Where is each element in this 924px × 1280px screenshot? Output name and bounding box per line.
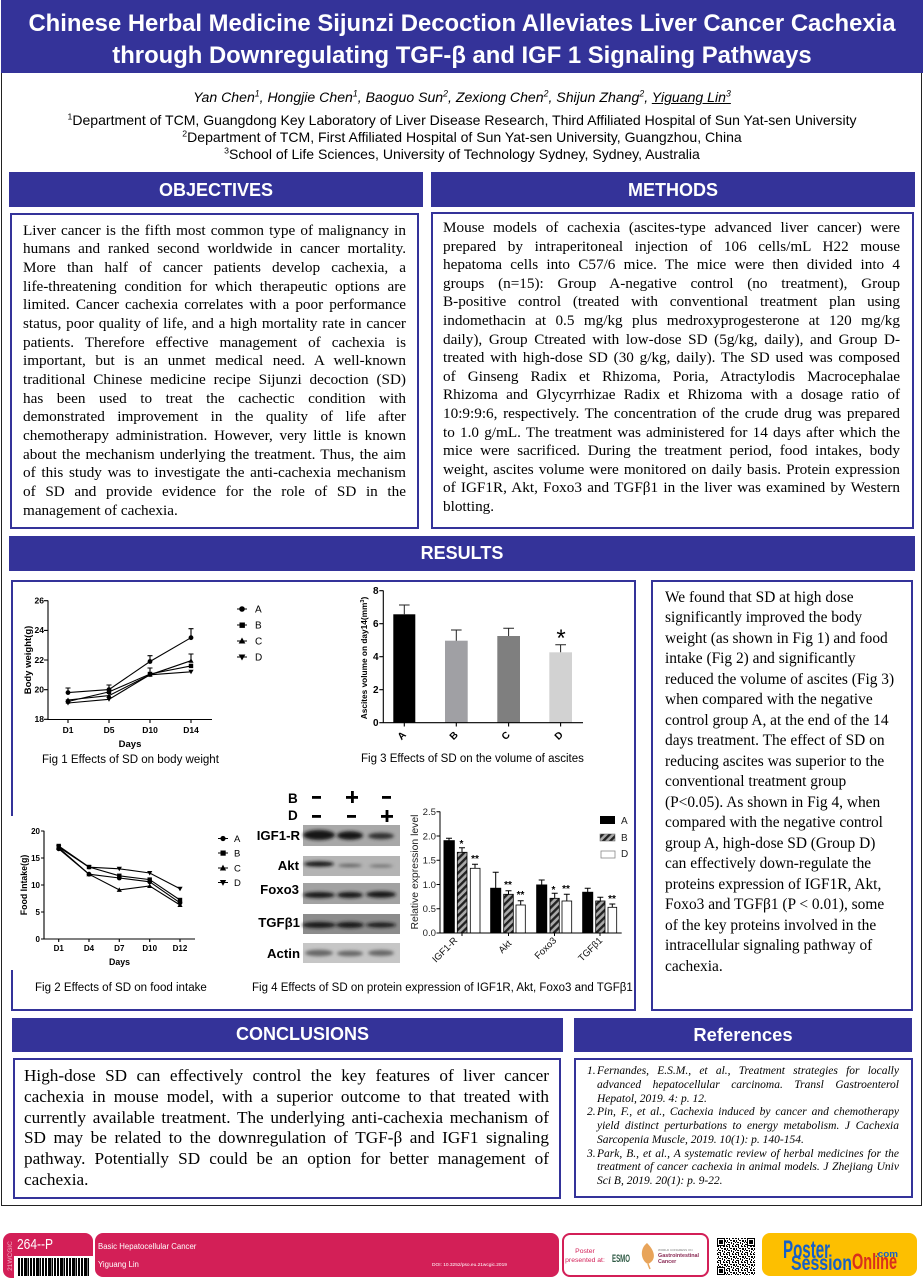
footer: presented at logos: presented at: [565, 1257, 605, 1264]
objectives text: important, but is an unmet medical need. A well-known [23, 352, 406, 369]
chart: Fig 2 food intake: C [234, 864, 241, 874]
footer: barcode [14, 1256, 93, 1278]
chart: Fig 2 food intake: D10 [142, 944, 158, 953]
results text: control group A, at the end of the 14 [665, 712, 889, 728]
references text [596, 1065, 899, 1187]
western blot: B [288, 791, 298, 806]
footer: poster number tab [3, 1233, 93, 1278]
title: Chinese Herbal Medicine Sijunzi Decoction Alleviates Liver Cancer Cachexia [28, 10, 896, 37]
results text: proteins expression of IGF1R, Akt, [665, 876, 881, 892]
chart: Fig 4 relative expression: Akt [497, 938, 514, 956]
western blot: TGFβ1 [258, 915, 300, 930]
chart: Fig 1 body weight: 18 [35, 714, 44, 724]
chart: Fig 4 relative expression: IGF1-R [430, 935, 460, 965]
chart: Fig 1 body weight [23, 596, 262, 750]
chart: Fig 4 relative expression: 2.0 [423, 832, 436, 842]
results text: days treatment. The effect of SD on [665, 732, 885, 749]
methods text: groups (n=15): Group A-negative control (no treatment), Group [443, 275, 900, 292]
chart: Fig 2 food intake: 10 [31, 881, 41, 890]
objectives text: demonstrated improvement in the quality of life after [23, 408, 406, 425]
footer: congress code: 21WCGIC [7, 1241, 14, 1271]
caption: Fig 2: Fig 2 Effects of SD on food intake [35, 982, 207, 994]
western blot: D [288, 808, 298, 823]
chart: Fig 3 ascites volume: 6 [373, 619, 379, 630]
chart: Fig 2 food intake: Food Intake(g) [19, 855, 29, 915]
footer: presented at logos: Poster [575, 1248, 596, 1255]
chart: Fig 4 relative expression: * [460, 839, 464, 850]
affiliations: 3School of Life Sciences, University of Technology Sydney, Sydney, Australia [224, 146, 700, 162]
title [1, 0, 923, 73]
chart: Fig 2 food intake: D [234, 878, 241, 889]
methods text: weight, ascites volume were monitored on daily basis. Protein expression [443, 461, 900, 478]
chart: Fig 4 relative expression: B [621, 833, 628, 844]
footer: presented at logos: WORLD CONGRESS ON [658, 1248, 693, 1252]
chart: Fig 2 food intake: D7 [114, 944, 125, 953]
panel: objectives [10, 213, 419, 529]
heading: references: References [693, 1024, 793, 1045]
references text: Sci B, 2019. 20(1): p. 9-22. [597, 1175, 723, 1187]
methods text: Rhizoma and Glycyrrhizae Radix et Rhizoma with a dosage ratio of [443, 386, 900, 403]
references text: Pin, F., et al., Cachexia induced by cancer and chemotherapy [597, 1106, 899, 1118]
chart: Fig 2 food intake: A [234, 834, 241, 845]
conclusions text [24, 1066, 549, 1189]
results text: intake (Fig 2) and significantly [665, 650, 856, 667]
chart: Fig 3 ascites volume: 2 [373, 685, 379, 696]
heading: methods [431, 172, 915, 207]
results text: of the key proteins involved in the [665, 916, 876, 934]
methods text: Mouse models of cachexia (ascites-type advanced liver cancer) were [443, 219, 900, 236]
session category: Basic Hepatocellular Cancer [98, 1242, 196, 1251]
objectives text: of SD and provide evidence for the role of SD in the [23, 483, 406, 500]
objectives text: More than half of cancer patients develop cachexia, a [23, 259, 406, 276]
caption: Fig 4: Fig 4 Effects of SD on protein expression of IGF1R, Akt, Foxo3 and TGFβ1 [252, 982, 633, 994]
western blot [257, 791, 400, 963]
objectives text: limited. Cancer cachexia correlates with a poor performance [23, 296, 406, 313]
objectives text: of this study was to investigate the anti-cachexia mechanism [23, 464, 406, 481]
chart: Fig 4 relative expression: * [552, 885, 556, 896]
methods text: prepared by intraperitoneal injection of 106 cells/mL H22 mouse [443, 238, 900, 255]
chart: Fig 4 relative expression: A [621, 816, 628, 827]
footer: presented at logos: ESMO [612, 1253, 630, 1265]
heading: objectives [9, 172, 423, 207]
chart: Fig 4 relative expression: 0.5 [423, 904, 436, 915]
references numbers [587, 1065, 596, 1160]
chart: Fig 1 body weight: 20 [35, 684, 44, 694]
chart: Fig 1 body weight: 22 [35, 655, 44, 665]
methods text: to 1.0 g/mL. The treatment was administered for 14 days after which the [443, 424, 900, 441]
chart: Fig 3 ascites volume: A [396, 730, 409, 743]
caption: Fig 3: Fig 3 Effects of SD on the volume of ascites [361, 753, 584, 765]
footer: PosterSessionOnline logo [762, 1233, 917, 1276]
western blot: IGF1-R [257, 828, 300, 843]
chart: Fig 4 relative expression: 1.5 [423, 856, 436, 866]
affiliations [67, 111, 856, 162]
objectives text: traditional Chinese medicine recipe Sijunzi decoction (SD) [23, 371, 406, 388]
chart: Fig 2 food intake: 0 [36, 935, 41, 944]
results text: (P<0.05). As shown in Fig 4, when [665, 794, 880, 810]
chart: Fig 3 ascites volume: 3 [360, 600, 366, 603]
results text: intracellular signaling pathway of [665, 937, 872, 954]
chart: Fig 4 relative expression: ** [504, 880, 512, 891]
objectives text: humans and ranked second worldwide in cancer mortality. [23, 240, 406, 257]
objectives text: status, poor quality of life, and a high mortality rate in cancer [23, 315, 406, 332]
chart: Fig 2 food intake: 20 [31, 827, 41, 836]
footer: presented at logos: Cancer [658, 1259, 677, 1265]
objectives text: patients. Therefore effective management of cachexia is [23, 334, 406, 351]
panel: results text [651, 580, 913, 1011]
conclusions text: High-dose SD can effectively control the key features of liver cancer [24, 1066, 549, 1085]
heading: methods: METHODS [628, 180, 718, 200]
chart: Fig 1 body weight: B [255, 620, 262, 632]
caption: Fig 1: Fig 1 Effects of SD on body weight [42, 754, 220, 766]
chart: Fig 4 relative expression [410, 807, 628, 965]
results text: reducing ascites was superior to the [665, 752, 884, 770]
chart: Fig 1 body weight: A [255, 604, 262, 616]
footer: presented at logos [565, 1243, 700, 1270]
references text: treatment of cancer cachexia in animal models. J Zhejiang Univ [597, 1161, 899, 1173]
chart: Fig 4 relative expression: Relative expression level [410, 815, 421, 929]
references text: Hepatol, 2019. 4: p. 12. [597, 1092, 707, 1104]
chart: Fig 3 ascites volume: * [556, 625, 566, 652]
chart: Fig 1 body weight: D1 [63, 725, 74, 735]
results text: significantly improved the body [665, 609, 862, 626]
objectives text: has been used to treat the cachectic condition with [23, 390, 406, 407]
results text: when compared with the negative [665, 691, 873, 708]
western blot: Foxo3 [260, 882, 299, 897]
chart: Fig 3 ascites volume: 0 [373, 718, 379, 729]
chart: Fig 3 ascites volume: 4 [373, 652, 379, 663]
chart: Fig 4 relative expression: 0.0 [423, 928, 436, 939]
panel: references [574, 1058, 913, 1198]
methods text: daily), Group Ctreated with low-dose SD (5g/kg, daily), and Group D- [443, 331, 900, 348]
references text: Fernandes, E.S.M., et al., Treatment strategies for locally [597, 1065, 899, 1077]
chart: Fig 1 body weight: Body weight(g) [23, 626, 34, 694]
conclusions text: currently available treatment. The underlying anti-cachexia mechanism of [24, 1108, 549, 1127]
references numbers: 2. [587, 1106, 596, 1118]
conclusions text: pathway. Potentially SD could be an option for better management of [24, 1149, 549, 1168]
chart: Fig 1 body weight: 24 [35, 625, 44, 635]
chart: Fig 3 ascites volume: C [500, 730, 513, 743]
heading: conclusions: CONCLUSIONS [236, 1024, 369, 1044]
methods text: treated with high-dose SD (30 g/kg, daily). The SD used was composed [443, 349, 900, 366]
chart: Fig 3 ascites volume: B [448, 730, 461, 743]
chart: Fig 3 ascites volume: 8 [373, 586, 379, 597]
footer: QR code [717, 1238, 755, 1275]
results text: group A, high-dose SD (Group D) [665, 834, 875, 852]
objectives text: management of cachexia. [23, 502, 178, 519]
references numbers: 1. [587, 1065, 596, 1077]
western blot: Akt [278, 858, 300, 873]
conclusions text: SD may be related to the downregulation of TGF-β and IGF1 signaling [24, 1128, 549, 1147]
chart: Fig 3 ascites volume: Ascites volume on day14(mm [359, 603, 369, 719]
chart: Fig 2 food intake: Days [109, 957, 130, 967]
methods text [443, 219, 900, 515]
chart: Fig 4 relative expression: ** [517, 890, 524, 901]
affiliations: 1Department of TCM, Guangdong Key Laboratory of Liver Disease Research, Third Affiliated Hospital of Sun Yat-sen University [67, 111, 856, 128]
footer: presented at box [562, 1233, 709, 1277]
western blot: Actin [267, 946, 300, 961]
footer: poster number: 264--P [17, 1236, 53, 1253]
footer: PosterSessionOnline logo: Poster [783, 1236, 830, 1264]
chart: Fig 2 food intake: D1 [54, 944, 64, 953]
doi: DOI: 10.3252/pso.eu.21wcgic.2019 [432, 1263, 507, 1268]
chart: Fig 4 relative expression: ** [562, 884, 570, 895]
chart: Fig 4 relative expression: ** [471, 854, 479, 865]
chart: Fig 1 body weight: D10 [142, 725, 158, 735]
conclusions text: cachexia. [24, 1170, 88, 1189]
objectives text: about the mechanism underlying the treatment. Thus, the aim [23, 446, 406, 463]
chart: Fig 2 food intake [19, 827, 241, 967]
chart: Fig 3 ascites volume: ) [359, 597, 369, 600]
results text: compared with the negative control [665, 814, 883, 831]
chart: Fig 4 relative expression: ** [608, 894, 616, 905]
heading: conclusions [12, 1018, 563, 1052]
panel: methods [431, 212, 914, 529]
chart: Fig 1 body weight: 26 [35, 596, 44, 606]
chart: Fig 2 food intake: B [234, 848, 240, 860]
chart: Fig 4 relative expression: TGFβ1 [576, 935, 605, 964]
chart: Fig 2 food intake: 5 [36, 908, 41, 917]
methods text: hepatoma cells into C57/6 mice. The mice were then divided into 4 [443, 256, 900, 273]
results text: can effectively down-regulate the [665, 855, 871, 872]
methods text: indomethacin at 0.5 mg/kg plus medroxyprogesterone at 120 mg/kg [443, 312, 900, 329]
chart: Fig 4 relative expression: 1.0 [423, 880, 436, 891]
chart: Fig 1 body weight: D [255, 652, 262, 664]
heading: references [574, 1018, 912, 1052]
white mask of figure 2 image [11, 816, 23, 970]
objectives text: life-threatening condition for which therapeutic options are [23, 278, 406, 295]
chart: Fig 4 relative expression: 2.5 [423, 807, 436, 818]
results text: cachexia. [665, 958, 723, 974]
chart: Fig 2 food intake: 15 [31, 854, 41, 863]
chart: Fig 4 relative expression: Foxo3 [533, 935, 559, 962]
results text: conventional treatment group [665, 773, 846, 790]
heading: results: RESULTS [421, 543, 503, 563]
references text: advanced hepatocellular carcinoma. Transl Gastroenterol [597, 1079, 899, 1091]
results text: Foxo3 and TGFβ1 (P < 0.01), some [665, 896, 884, 913]
affiliations: 2Department of TCM, First Affiliated Hospital of Sun Yat-sen University, Guangzhou, China [182, 129, 742, 145]
presenter name: Yiguang Lin [98, 1260, 139, 1269]
footer: PosterSessionOnline logo: Session [791, 1252, 852, 1275]
methods text: of IGF1R, Akt, Foxo3 and TGFβ1 in the liver was examined by Western [443, 479, 900, 496]
footer: presented at logos: Gastrointestinal [658, 1253, 700, 1259]
methods text: B-positive control (treated with conventional treatment plan using [443, 293, 900, 310]
panel: results figures [11, 580, 636, 1011]
results text: weight (as shown in Fig 1) and food [665, 630, 888, 646]
references text: yield distinct perturbations to energy metabolism. J Cachexia [597, 1120, 899, 1132]
heading: results [9, 536, 915, 571]
references numbers: 3. [587, 1148, 596, 1160]
title: through Downregulating TGF-β and IGF 1 Signaling Pathways [112, 42, 812, 69]
methods text: blotting. [443, 498, 494, 515]
chart: Fig 2 food intake: D12 [173, 944, 188, 953]
methods text: of Ginseng Radix et Rhizoma, Poria, Atractylodis Macrocephalae [443, 368, 900, 385]
chart: Fig 1 body weight: Days [119, 739, 141, 750]
footer: session banner [95, 1233, 559, 1277]
chart: Fig 1 body weight: D5 [104, 725, 115, 735]
chart: Fig 1 body weight: C [255, 636, 262, 648]
chart: Fig 3 ascites volume: D [553, 730, 566, 743]
heading: objectives: OBJECTIVES [159, 180, 273, 200]
chart: Fig 1 body weight: D14 [183, 725, 199, 735]
results text: reduced the volume of ascites (Fig 3) [665, 670, 894, 688]
methods text: 10:9:9:6, respectively. The concentration of the crude drug was prepared [443, 405, 900, 422]
chart: Fig 2 food intake: D4 [84, 944, 95, 953]
references text: Park, B., et al., A systematic review of herbal medicines for the [597, 1148, 899, 1160]
methods text: mice were sacrificed. During the treatment period, food intakes, body [443, 442, 900, 459]
references text: Sarcopenia Muscle, 2019. 10(1): p. 140-154. [597, 1134, 804, 1146]
objectives text [23, 222, 406, 519]
authors: Yan Chen1, Hongjie Chen1, Baoguo Sun2, Zexiong Chen2, Shijun Zhang2, Yiguang Lin3 [193, 88, 731, 105]
results text [665, 588, 894, 974]
results text: We found that SD at high dose [665, 588, 854, 606]
panel: conclusions [13, 1058, 561, 1199]
conclusions text: cachexia in mouse model, with a superior outcome to that treated with [24, 1087, 549, 1106]
objectives text: Liver cancer is the fifth most common type of malignancy in [23, 222, 406, 238]
objectives text: chemotherapy administration. However, very little is known [23, 427, 406, 444]
chart: Fig 3 ascites volume [359, 586, 583, 743]
chart: Fig 4 relative expression: D [621, 849, 628, 860]
footer: PosterSessionOnline logo: .com [875, 1249, 898, 1259]
